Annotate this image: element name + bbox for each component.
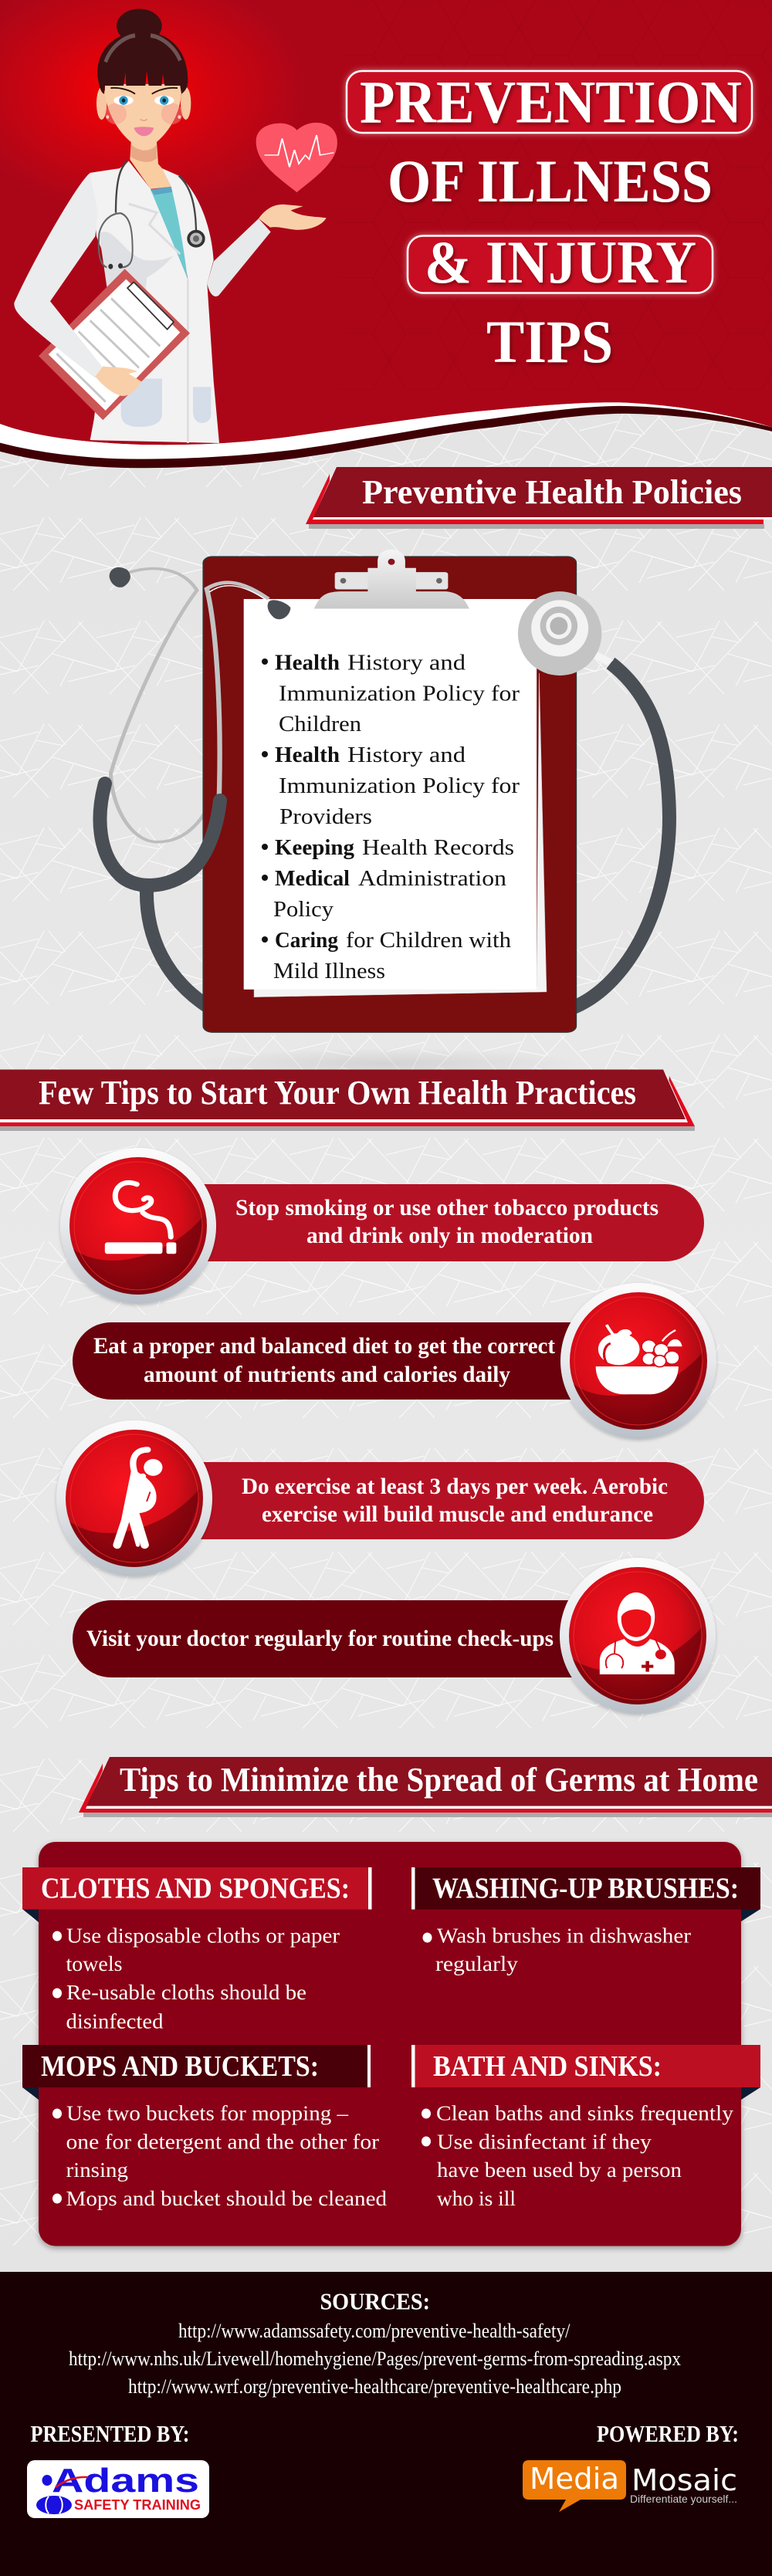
sources: http://www.wrf.org/preventive-healthcare/preventive-healthcare.php <box>128 2375 621 2398</box>
list: policies: Keeping <box>275 835 354 860</box>
section: bath and sinks: Use disinfectant if they <box>437 2131 652 2154</box>
illustration: doctor with clipboard <box>14 8 327 443</box>
icon: cigarette and smoke <box>105 1183 176 1254</box>
list: policies: History and <box>347 743 466 767</box>
right arm <box>207 218 271 296</box>
section: cloths and sponges: Use disposable cloths or paper <box>66 1924 340 1948</box>
title line 2: OF ILLNESS <box>388 147 713 215</box>
tip 4: doctor visit: Visit your doctor regularly for routine check-ups <box>86 1626 554 1651</box>
list: policies: Health Records <box>362 835 514 860</box>
title box: prevention <box>347 71 752 133</box>
section: washing-up brushes: regularly <box>435 1952 519 1975</box>
tip 1: stop smoking: Stop smoking or use other tobacco products <box>235 1195 659 1220</box>
section: mops and buckets <box>22 2045 388 2210</box>
section: bath and sinks: Clean baths and sinks frequently <box>436 2102 734 2125</box>
section: washing-up brushes: WASHING-UP BRUSHES: <box>432 1873 739 1905</box>
list: policies: Immunization Policy for <box>279 681 520 706</box>
title box: injury <box>408 236 713 293</box>
icon: fruit bowl <box>596 1325 681 1394</box>
section: mops and buckets: MOPS AND BUCKETS: <box>41 2050 319 2083</box>
heading: preventive health policies: Preventive Health Policies <box>362 473 742 511</box>
panel: germ tips <box>22 1842 760 2246</box>
title <box>347 68 752 375</box>
section: bath and sinks: have been used by a person <box>437 2158 682 2182</box>
chest piece <box>518 591 611 675</box>
logo: media mosaic <box>523 2460 737 2512</box>
footer <box>0 2272 772 2576</box>
section: mops and buckets: Use two buckets for mopping – <box>66 2102 349 2125</box>
sources: SOURCES: <box>320 2288 430 2314</box>
sources <box>69 2288 681 2398</box>
list: policies: Medical <box>275 866 350 891</box>
section: bath and sinks: who is ill <box>437 2187 516 2210</box>
clip <box>314 550 469 608</box>
logo: adams safety training: SAFETY TRAINING <box>74 2497 201 2513</box>
logo: adams safety training: Adams <box>52 2462 199 2500</box>
presented by: PRESENTED BY: <box>31 2420 190 2447</box>
heading: few tips <box>0 1070 695 1131</box>
section: cloths and sponges: towels <box>66 1952 122 1975</box>
left arm <box>14 173 103 378</box>
title line 1: PREVENTION <box>360 68 742 136</box>
list: policies: Mild Illness <box>273 959 385 983</box>
tip 2: balanced diet: Eat a proper and balanced diet to get the correct <box>93 1333 555 1359</box>
section: mops and buckets: one for detergent and the other for <box>66 2131 379 2154</box>
icon: doctor <box>600 1593 675 1674</box>
section: bath and sinks <box>411 2045 760 2210</box>
sources: http://www.nhs.uk/Livewell/homehygiene/Pages/prevent-germs-from-spreading.aspx <box>69 2348 681 2370</box>
logo: media mosaic: Media <box>530 2462 619 2496</box>
list: policies: Caring <box>275 928 338 953</box>
clipboard <box>192 550 611 1032</box>
tip 1: stop smoking: and drink only in moderation <box>306 1223 593 1248</box>
list: policies: History and <box>347 650 466 675</box>
section: washing-up brushes: Wash brushes in dishwasher <box>437 1924 691 1948</box>
dark tube over board edge <box>192 801 220 869</box>
list: policies <box>262 650 520 983</box>
list: policies: Policy <box>273 897 334 922</box>
heading: few tips: Few Tips to Start Your Own Health Practices <box>39 1074 636 1112</box>
section: washing-up brushes <box>411 1867 760 1975</box>
section: mops and buckets: rinsing <box>66 2158 128 2182</box>
tip 2: balanced diet: amount of nutrients and calories daily <box>144 1362 510 1387</box>
title line 4: TIPS <box>486 308 613 375</box>
stethoscope on coat <box>116 161 196 230</box>
tip 2: balanced diet <box>73 1283 716 1439</box>
section: cloths and sponges: disinfected <box>66 2009 164 2033</box>
logo: media mosaic: Mosaic <box>631 2463 737 2497</box>
tip 4: doctor visit <box>73 1558 716 1714</box>
title line 3: & INJURY <box>425 228 696 296</box>
paper <box>244 599 537 990</box>
list: policies: Providers <box>279 804 372 829</box>
list: policies: Health <box>275 743 340 767</box>
tip 3: exercise <box>56 1420 704 1576</box>
list: policies: Health <box>275 650 340 675</box>
board <box>203 557 576 1032</box>
section: cloths and sponges: CLOTHS AND SPONGES: <box>41 1873 350 1905</box>
icon: stretching figure <box>117 1450 162 1545</box>
heading: preventive health policies <box>306 467 772 529</box>
illustration: stethoscope behind clipboard <box>100 567 669 1007</box>
tip 1: stop smoking <box>60 1148 704 1304</box>
section: bath and sinks: BATH AND SINKS: <box>433 2050 662 2083</box>
paper back sheet <box>254 673 547 997</box>
logo: media mosaic: Differentiate yourself... <box>630 2493 737 2505</box>
list: policies: for Children with <box>346 928 512 953</box>
tip 3: exercise: Do exercise at least 3 days per week. Aerobic <box>242 1474 668 1499</box>
list: policies: Children <box>279 712 362 736</box>
icon: heart with pulse line <box>256 123 337 192</box>
list: policies: Administration <box>358 866 507 891</box>
sources: http://www.adamssafety.com/preventive-health-safety/ <box>178 2320 571 2342</box>
logo: adams safety training <box>27 2460 209 2518</box>
stethoscope tubing over board <box>207 583 269 797</box>
section: cloths and sponges: Re-usable cloths should be <box>66 1981 306 2004</box>
heading: minimize germs <box>79 1757 772 1817</box>
clipboard held <box>39 269 190 420</box>
section: cloths and sponges <box>22 1867 372 2033</box>
header banner <box>0 0 772 468</box>
section: mops and buckets: Mops and bucket should be cleaned <box>66 2187 388 2210</box>
tip 3: exercise: exercise will build muscle and endurance <box>262 1501 653 1527</box>
powered by: POWERED BY: <box>597 2420 739 2447</box>
list: policies: Immunization Policy for <box>279 773 520 798</box>
coat <box>90 161 219 443</box>
